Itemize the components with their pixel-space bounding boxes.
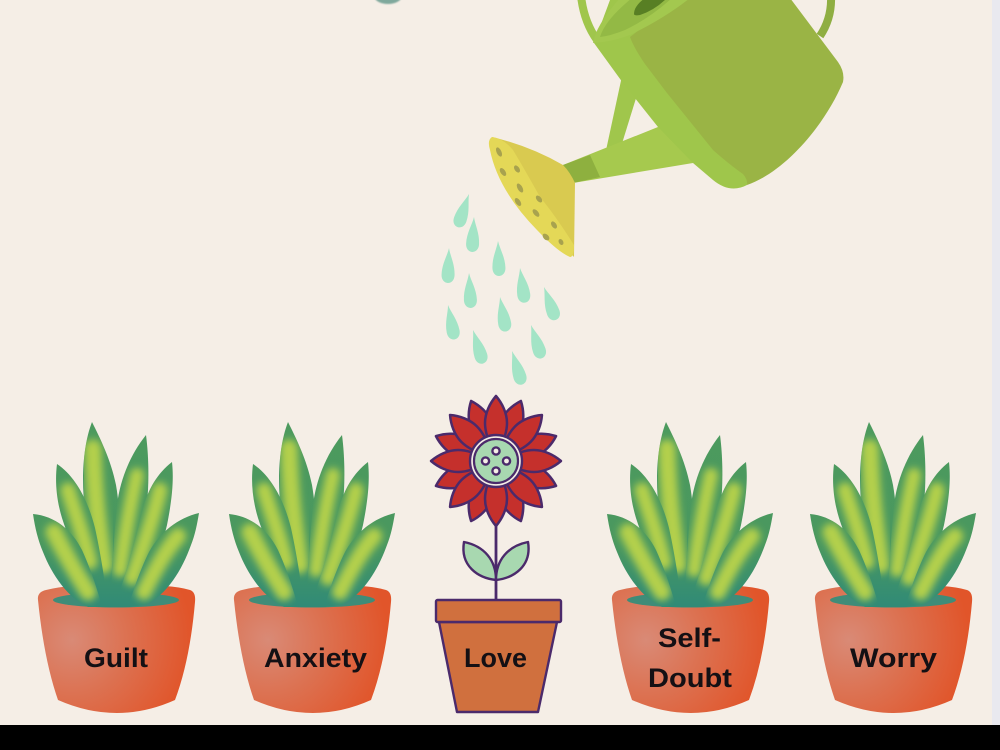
can body [630, 0, 843, 185]
icon: sprinkler head [489, 137, 575, 257]
head holes [495, 146, 565, 246]
flower petals [431, 396, 561, 526]
label: Guilt: Guilt [84, 643, 148, 673]
icon: watering can [563, 0, 843, 189]
label: Worry: Worry [850, 643, 937, 673]
flower leaves [463, 542, 529, 580]
flower pot rim [436, 600, 561, 622]
plant: Anxiety [229, 422, 395, 713]
head back [492, 137, 575, 257]
can spout [563, 127, 710, 183]
can opening [600, 0, 672, 37]
can brace [605, 76, 637, 155]
can opening rim [593, 0, 690, 43]
spout shadow [563, 155, 600, 183]
flower: Love [431, 396, 561, 712]
label: Anxiety: Anxiety [264, 643, 367, 673]
plant: Guilt [33, 422, 199, 713]
flower pot body [439, 622, 557, 712]
can hole [634, 0, 667, 15]
water drops [441, 192, 562, 386]
flower stem [495, 520, 497, 601]
head front [489, 137, 574, 257]
label: Self-Doubt: Self- [658, 623, 721, 653]
partial teal shape at top edge [374, 0, 402, 4]
plant: Worry [810, 422, 976, 713]
plant: Self-Doubt [607, 422, 773, 713]
can body front band [594, 0, 790, 189]
label: Love: Love [464, 643, 527, 673]
label: Self-Doubt: Doubt [648, 663, 732, 693]
can handles [581, 0, 831, 40]
